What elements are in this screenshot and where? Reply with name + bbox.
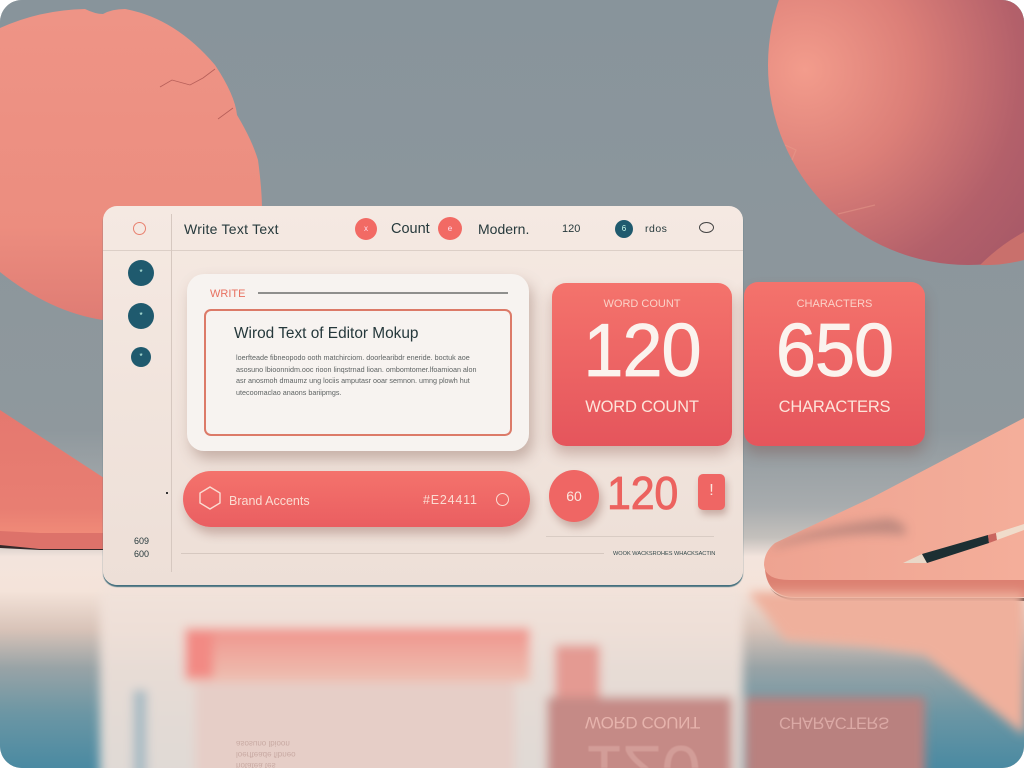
app title: Write Text Text [184, 221, 279, 237]
card value: 650 [776, 309, 893, 393]
pill label: Brand Accents [229, 494, 310, 508]
red icon e [438, 217, 462, 240]
rdos label: rdos [645, 223, 667, 235]
body text: asosuno lbioonnidm.ooc rioon linqstrnad lioan. ombomtomer.lfoamioan alon [236, 364, 477, 374]
card label: WORD COUNT [585, 398, 699, 416]
sidebar icon two [128, 303, 154, 329]
text frame [204, 309, 512, 436]
teal icon: 6 [622, 224, 626, 233]
card caption: WORD COUNT [604, 298, 680, 310]
right wedge [764, 418, 1024, 601]
red icon e: e [448, 224, 452, 233]
sidebar numbers: 609 [134, 536, 149, 546]
reflected body text: loerfteade fibneo [236, 750, 296, 759]
hexagon icon [199, 486, 221, 510]
pill hex code: #E24411 [423, 493, 478, 507]
body text [236, 353, 477, 396]
left wedge [0, 410, 104, 550]
brand accents pill [183, 471, 530, 527]
floor reflection [100, 590, 1024, 768]
right sphere [768, 0, 1024, 265]
teal icon [615, 220, 633, 238]
reflected characters label: CHARACTERS [779, 714, 889, 732]
sidebar icon one [128, 260, 154, 286]
top bar rule [103, 250, 743, 251]
footer rule [181, 553, 604, 554]
circle badge: 60 [566, 488, 582, 504]
number label: 120 [562, 223, 580, 235]
count label: Count [391, 221, 430, 237]
chat icon [699, 222, 714, 233]
alert badge [698, 474, 725, 510]
logo icon [133, 222, 146, 235]
reflected body text [236, 739, 296, 768]
sidebar icon two: * [139, 311, 143, 320]
editor heading: Wirod Text of Editor Mokup [234, 325, 418, 342]
sidebar dot [166, 492, 168, 494]
sidebar icon three: * [139, 352, 143, 361]
characters card [744, 282, 925, 446]
body text: asr anosmoh dmaumz ung lociis amputasr ooar semnon. umng plowh hut [236, 376, 470, 385]
red icon x [355, 218, 377, 240]
body text: utecoomaclao anaons bariipmgs. [236, 388, 341, 396]
red icon x: x [364, 224, 368, 233]
editor card [187, 274, 529, 451]
reflected body text: asosuno lbioon [236, 739, 290, 748]
write rule [258, 292, 508, 294]
sidebar icon one: * [139, 268, 143, 277]
footer text: WOOK WACKSROHES WHACKSACTIN [613, 551, 715, 557]
left sphere [0, 9, 262, 320]
circle badge [549, 470, 599, 522]
card label: CHARACTERS [779, 398, 890, 416]
reflected word count label: WORD COUNT [585, 713, 700, 732]
pen [903, 524, 1024, 563]
sidebar rule [171, 214, 172, 572]
sidebar numbers [134, 536, 149, 559]
modern label: Modern. [478, 221, 529, 237]
card caption: CHARACTERS [797, 298, 872, 310]
main panel [103, 206, 743, 585]
sidebar icon three [131, 347, 151, 367]
big number: 120 [607, 468, 678, 520]
lower rule [546, 536, 714, 537]
body text: loerfteade fibneopodo ooth matchirciom. doorlearibdr eneride. boctuk aoe [236, 353, 470, 362]
alert badge: ! [709, 482, 714, 499]
sidebar numbers: 600 [134, 549, 149, 559]
pill dot [496, 493, 509, 506]
word count card [552, 283, 732, 446]
card value: 120 [583, 309, 701, 393]
write label: WRITE [210, 288, 245, 300]
